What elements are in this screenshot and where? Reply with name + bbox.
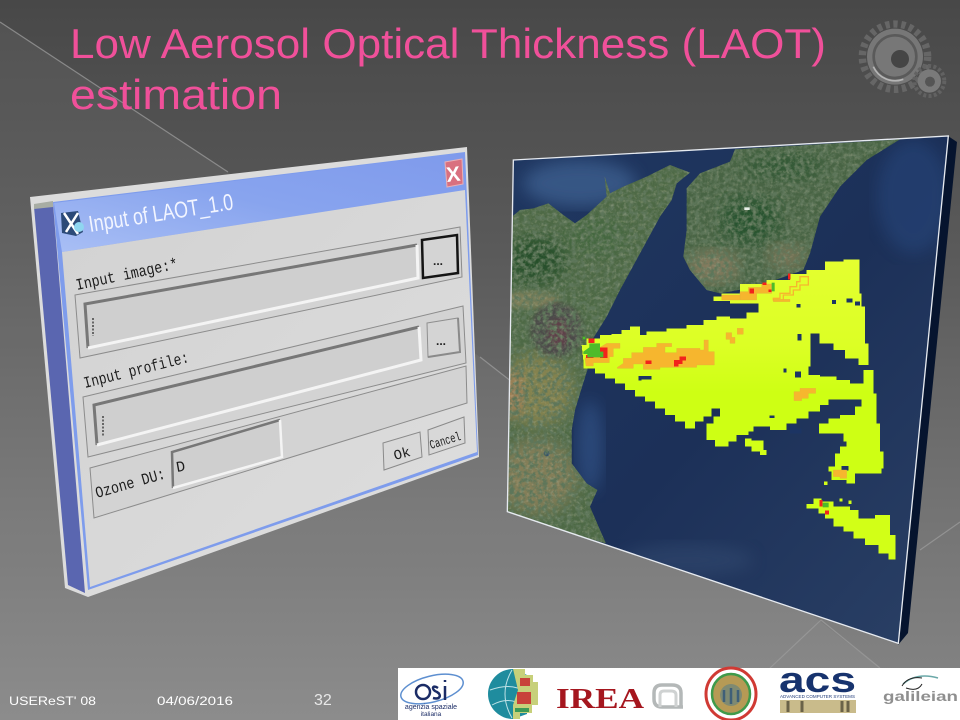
label: input profile: Input profile: (82, 349, 191, 393)
ozone group: D (175, 459, 187, 477)
dialog slab edges (30, 147, 479, 597)
icon: gears (862, 24, 944, 96)
logo: ACS: acs (779, 659, 856, 700)
browse button 2: ... (436, 334, 446, 348)
footer: event name: USEReST' 08 (9, 696, 96, 708)
land: Calabria (683, 139, 900, 293)
footer: slide number: 32 (314, 692, 332, 709)
label: ozone: Ozone DU: (93, 466, 168, 503)
title (70, 20, 826, 118)
ok button: Ok (392, 445, 413, 465)
title: estimation (70, 71, 282, 118)
logo: ASI (398, 669, 466, 718)
sea (500, 130, 960, 650)
input image group (75, 227, 462, 358)
logo: Galileian (883, 676, 958, 704)
aerosol: low (582, 259, 883, 483)
logo strip (398, 659, 960, 720)
input profile group (83, 306, 466, 457)
aerosol: high (586, 273, 829, 515)
close button: X (445, 163, 461, 187)
title bar (54, 153, 465, 252)
panel: satellite map with aerosol overlay (497, 130, 960, 650)
panel: LAOT input dialog (30, 147, 479, 597)
aerosol: holes (638, 298, 860, 471)
logo: ASI: agenzia spaziale (405, 704, 457, 711)
ozone group (90, 366, 467, 518)
map image (497, 130, 960, 650)
map slab side (898, 136, 957, 645)
aerosol: medium (585, 277, 847, 478)
dialog window frame (53, 152, 478, 590)
logo: CNR (654, 685, 683, 707)
logo: ACS: ADVANCED COMPUTER SYSTEMS (780, 694, 855, 699)
browse button 1 (422, 235, 458, 278)
browse button 2 (427, 318, 460, 357)
logo: globe (488, 669, 538, 719)
label: input image: Input image:* (74, 256, 180, 295)
client area (62, 190, 477, 587)
map border (507, 136, 948, 643)
app icon (61, 211, 84, 236)
ok button (383, 432, 422, 470)
cancel button (428, 417, 465, 455)
logo: IREA: IREA (556, 683, 644, 715)
dialog title text: Input of LAOT_1.0 (87, 188, 235, 237)
logo: ACS (779, 659, 856, 713)
logo: Galileian: galileian (883, 689, 958, 704)
cancel button: Cancel (428, 430, 463, 453)
browse button 1: ... (433, 254, 443, 268)
footer: date: 04/06/2016 (157, 696, 233, 708)
logo: university seal (706, 668, 756, 720)
logo: ASI: italiana (421, 711, 442, 718)
land: Sicily (497, 165, 690, 543)
aerosol: very high (583, 283, 829, 507)
title: Low Aerosol Optical Thickness (LAOT) (70, 20, 826, 67)
